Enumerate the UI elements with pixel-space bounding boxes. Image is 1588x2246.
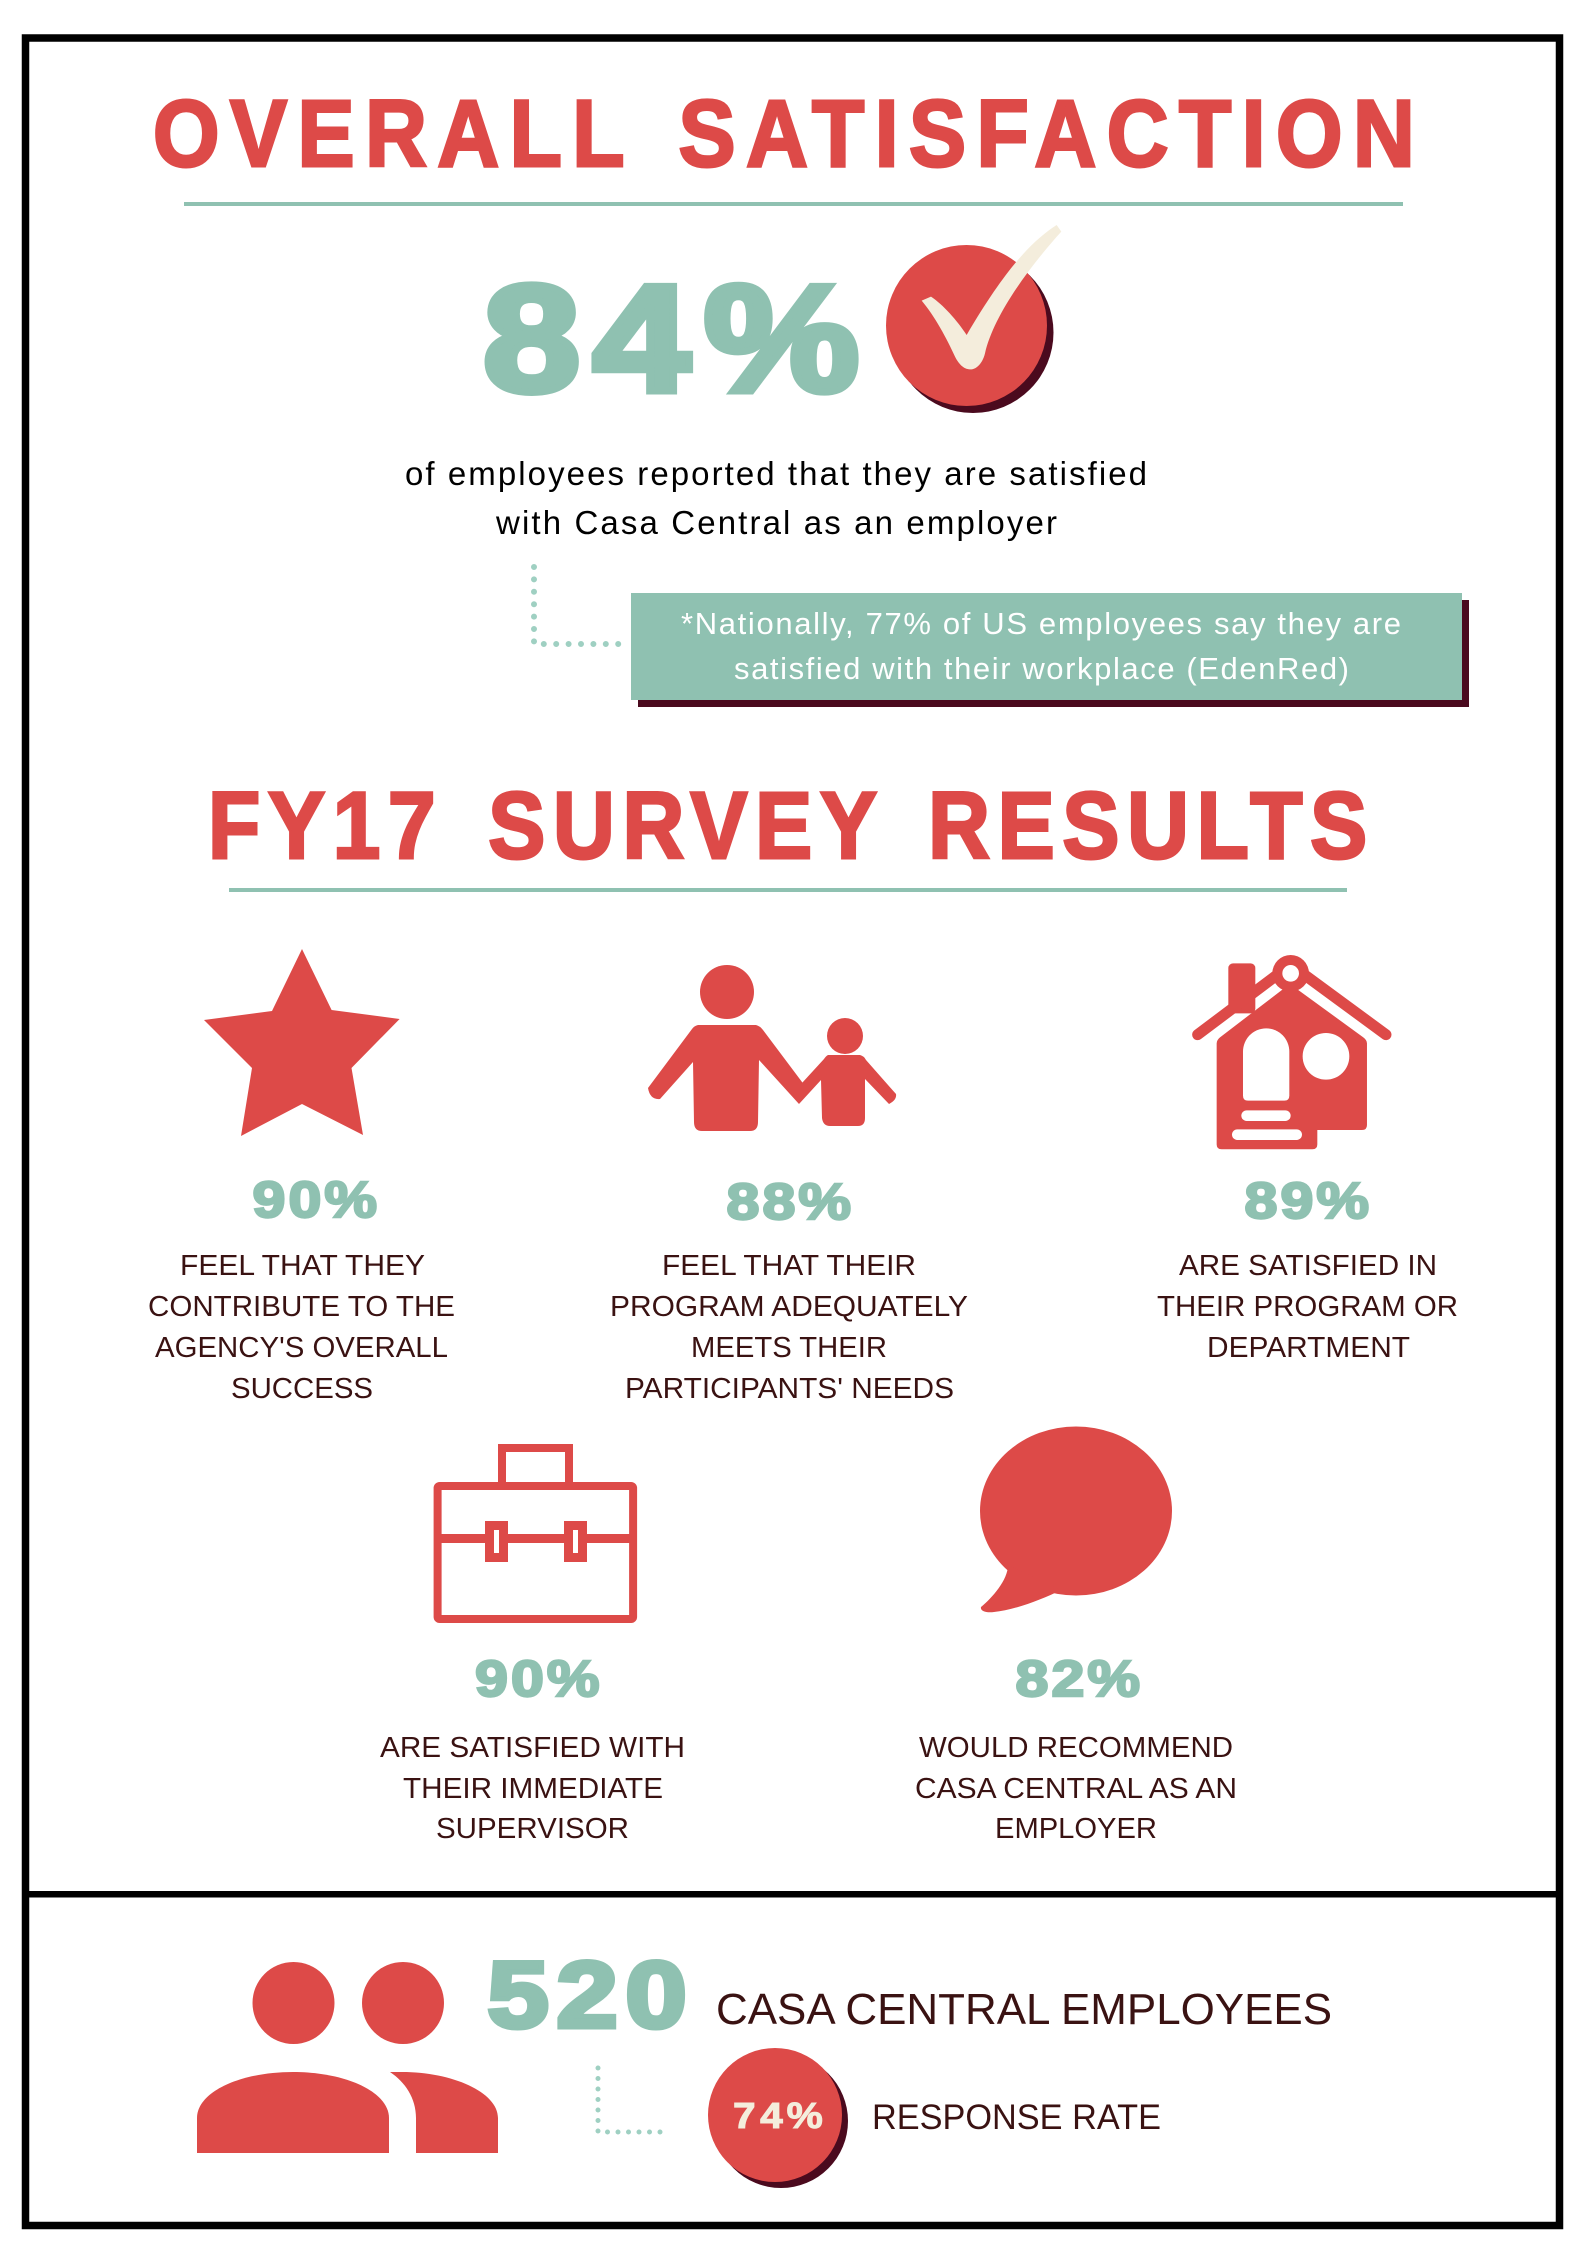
- stat: 90 percent supervisor: 90%: [475, 1650, 600, 1707]
- icon: house: [1198, 955, 1386, 1149]
- panel: program or department: [1157, 955, 1458, 1364]
- label: supervisor: SUPERVISOR: [436, 1813, 629, 1845]
- label: department: DEPARTMENT: [1207, 1332, 1410, 1364]
- label: participants: PARTICIPANTS' NEEDS: [625, 1373, 954, 1405]
- panel: immediate supervisor: [380, 1448, 685, 1845]
- callout: national comparison: satisfied with their workplace (EdenRed): [734, 651, 1349, 686]
- stat: 90 percent: 90%: [252, 1171, 377, 1228]
- text: employee satisfaction statement: [405, 455, 1147, 541]
- label: contribute: [148, 1250, 455, 1405]
- icon: two people: [197, 1962, 498, 2153]
- label: participants: [610, 1250, 968, 1405]
- stat: 89 percent: 89%: [1244, 1172, 1369, 1229]
- text: casa central employees: CASA CENTRAL EMPLOYEES: [716, 1985, 1332, 2034]
- heading: FY17 survey results: FY17 SURVEY RESULTS: [208, 773, 1367, 879]
- title: overall satisfaction: OVERALL SATISFACTION: [153, 81, 1415, 187]
- stat: 520: 520: [488, 1942, 687, 2047]
- icon: star: [204, 949, 400, 1136]
- label: supervisor: [380, 1732, 685, 1845]
- label: recommend: [915, 1732, 1237, 1845]
- heading underline: [229, 888, 1347, 892]
- stat: 84 percent: 84%: [483, 254, 859, 423]
- callout: national comparison: [631, 593, 1469, 707]
- label: contribute: CONTRIBUTE TO THE: [148, 1291, 455, 1323]
- text: employee satisfaction statement: with Casa Central as an employer: [495, 504, 1057, 541]
- label: participants: FEEL THAT THEIR: [662, 1250, 916, 1282]
- label: contribute: FEEL THAT THEY: [180, 1250, 425, 1282]
- text: response rate: RESPONSE RATE: [872, 2098, 1161, 2137]
- label: department: ARE SATISFIED IN: [1179, 1250, 1437, 1282]
- panel: participants' needs: [610, 965, 968, 1405]
- icon: speech bubble: [980, 1426, 1172, 1612]
- label: department: THEIR PROGRAM OR: [1157, 1291, 1458, 1323]
- label: recommend: EMPLOYER: [995, 1813, 1157, 1845]
- panel: employee count: [197, 1942, 1332, 2188]
- panel: recommend employer: [915, 1426, 1237, 1845]
- label: contribute: SUCCESS: [231, 1373, 373, 1405]
- label: recommend: CASA CENTRAL AS AN: [915, 1773, 1237, 1805]
- icon: briefcase: [435, 1448, 635, 1619]
- text: employee satisfaction statement: of employees reported that they are satisfied: [405, 455, 1147, 492]
- icon: check mark badge: [886, 225, 1061, 413]
- label: supervisor: ARE SATISFIED WITH: [380, 1732, 685, 1764]
- stat: 82 percent: 82%: [1016, 1650, 1140, 1707]
- title underline: [184, 202, 1403, 206]
- label: contribute: AGENCY'S OVERALL: [155, 1332, 448, 1364]
- label: recommend: WOULD RECOMMEND: [919, 1732, 1233, 1764]
- label: department: [1157, 1250, 1458, 1364]
- dotted connector to callout: [534, 567, 627, 644]
- callout: national comparison: *Nationally, 77% of US employees say they are: [681, 606, 1401, 641]
- dotted connector to response rate: [598, 2068, 670, 2132]
- icon: adult and child: [648, 965, 896, 1131]
- panel: contribute to success: [148, 949, 455, 1405]
- label: supervisor: THEIR IMMEDIATE: [403, 1773, 663, 1805]
- label: participants: MEETS THEIR: [691, 1332, 887, 1364]
- label: participants: PROGRAM ADEQUATELY: [610, 1291, 968, 1323]
- badge: 74 percent: 74%: [733, 2096, 823, 2136]
- stat: 88 percent: 88%: [726, 1173, 851, 1230]
- badge: 74 percent: [708, 2048, 848, 2188]
